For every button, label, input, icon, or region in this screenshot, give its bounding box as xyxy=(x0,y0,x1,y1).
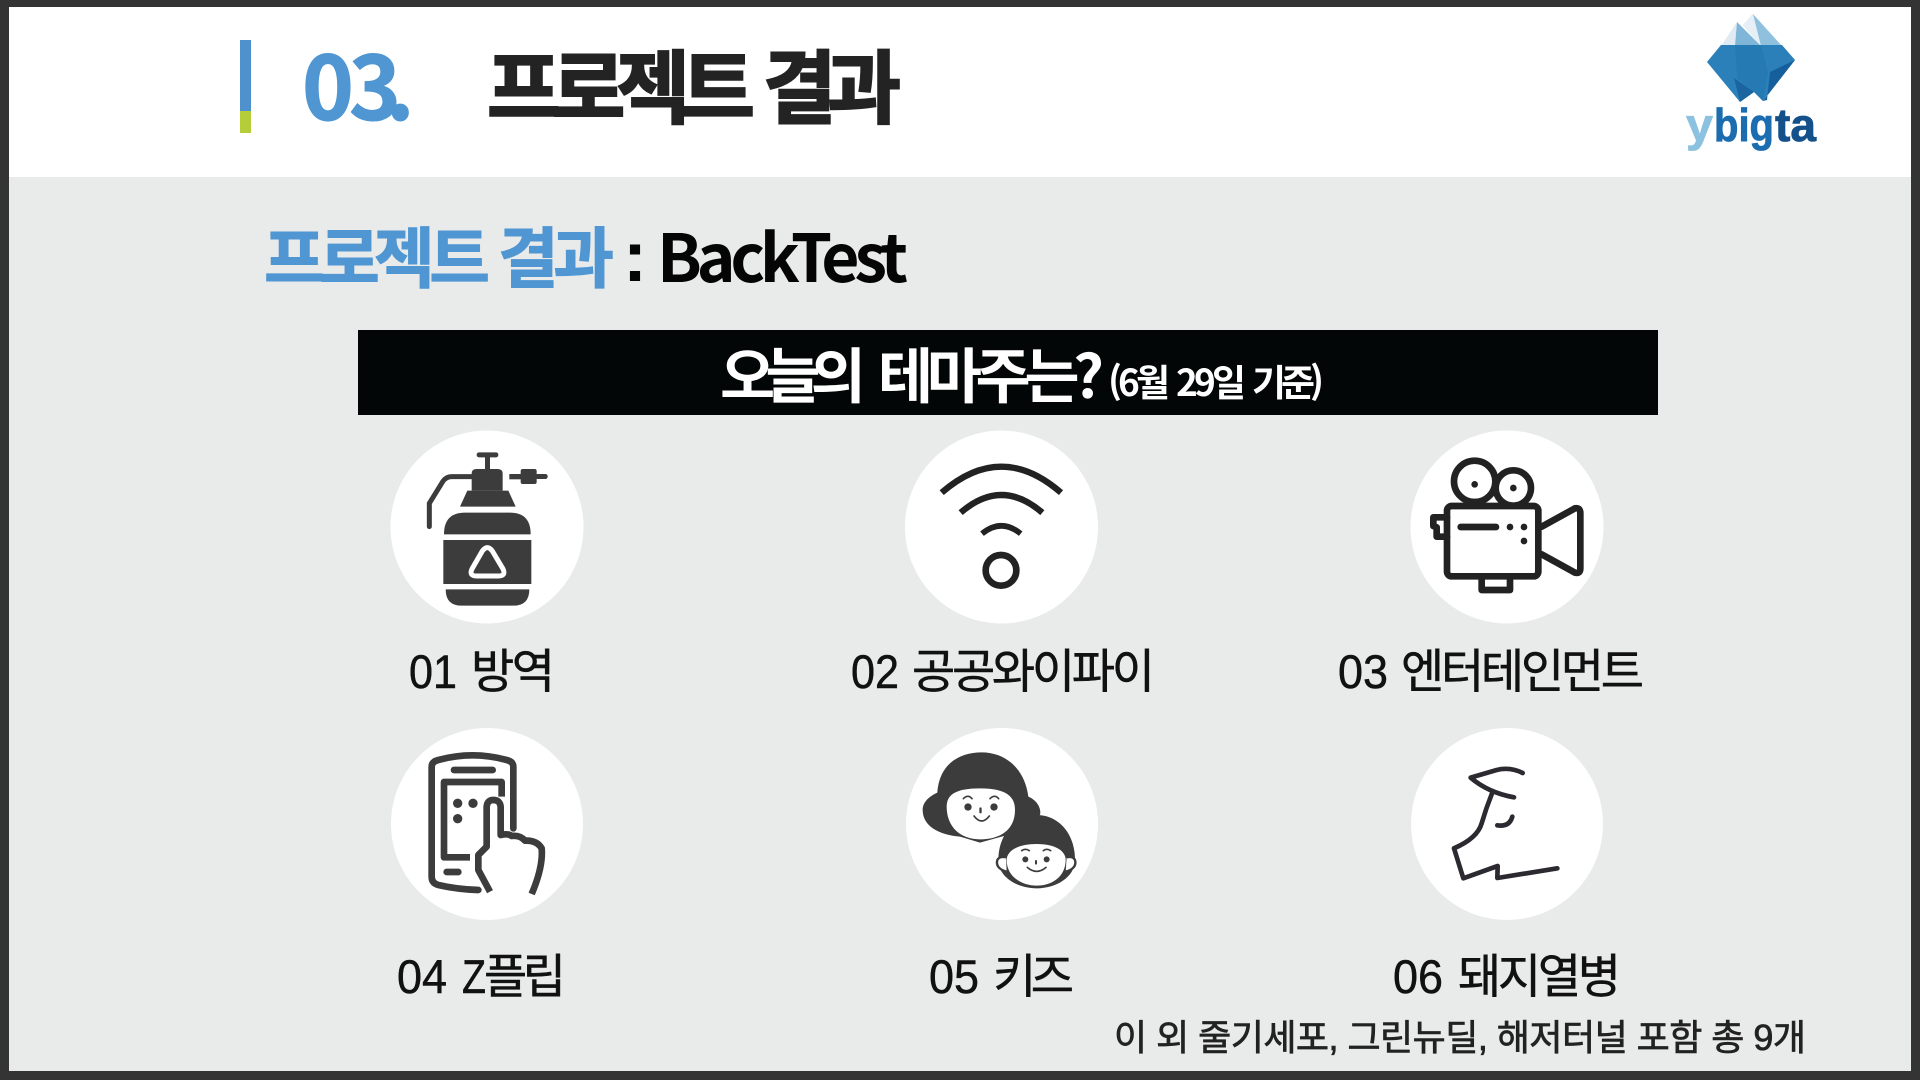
section accent bar xyxy=(240,40,251,133)
logo: ybigta xyxy=(1686,14,1816,151)
label 04 xyxy=(397,950,566,1003)
theme 01: sprayer xyxy=(390,430,584,624)
subheading: BackTest xyxy=(657,206,908,302)
label 02: 02 xyxy=(851,645,899,698)
title: 결과 xyxy=(763,25,901,141)
theme banner: 오늘의 xyxy=(720,329,866,416)
subheading: 프로젝트 xyxy=(264,206,490,302)
theme 03: movie camera xyxy=(1410,430,1604,624)
theme 05: kids xyxy=(906,728,1098,920)
subheading: : xyxy=(623,217,647,297)
logo: ybigta: big xyxy=(1714,99,1774,151)
theme banner: 29일 xyxy=(1176,353,1246,407)
theme banner: (6월 xyxy=(1108,353,1170,407)
logo: ybigta: y xyxy=(1686,99,1713,151)
theme banner: 테마주는? xyxy=(878,329,1104,416)
subheading xyxy=(264,206,908,302)
footnote: 이 외 줄기세포, 그린뉴딜, 해저터널 포함 총 9개 xyxy=(1114,1017,1806,1058)
label 04: 04 xyxy=(397,950,447,1003)
label 01: 01 xyxy=(409,645,457,698)
label 04: 플립 xyxy=(484,950,566,1003)
label 05: 키즈 xyxy=(993,950,1074,1003)
label 01 xyxy=(409,645,555,698)
label 03: 03 xyxy=(1338,645,1388,698)
label 01: 방역 xyxy=(471,645,555,698)
label 05: 05 xyxy=(929,950,979,1003)
title: 프로젝트 xyxy=(487,25,755,141)
section number: 03. xyxy=(302,19,415,146)
theme 02: wifi xyxy=(905,430,1098,624)
label 02: 공공와이파이 xyxy=(912,645,1155,698)
label 04: Z xyxy=(462,950,486,1003)
label 06: 06 xyxy=(1393,950,1443,1003)
theme banner xyxy=(358,329,1658,416)
subheading: 결과 xyxy=(498,206,614,302)
header band xyxy=(9,7,1911,177)
logo: ybigta: ta xyxy=(1775,99,1816,151)
theme banner: 기준) xyxy=(1252,353,1324,407)
theme 04: foldable phone xyxy=(391,728,583,920)
label 03: 엔터테인먼트 xyxy=(1401,645,1644,698)
theme 06: pig line drawing xyxy=(1411,728,1603,920)
label 05 xyxy=(929,950,1074,1003)
title xyxy=(487,25,901,141)
label 06: 돼지열병 xyxy=(1458,950,1621,1003)
